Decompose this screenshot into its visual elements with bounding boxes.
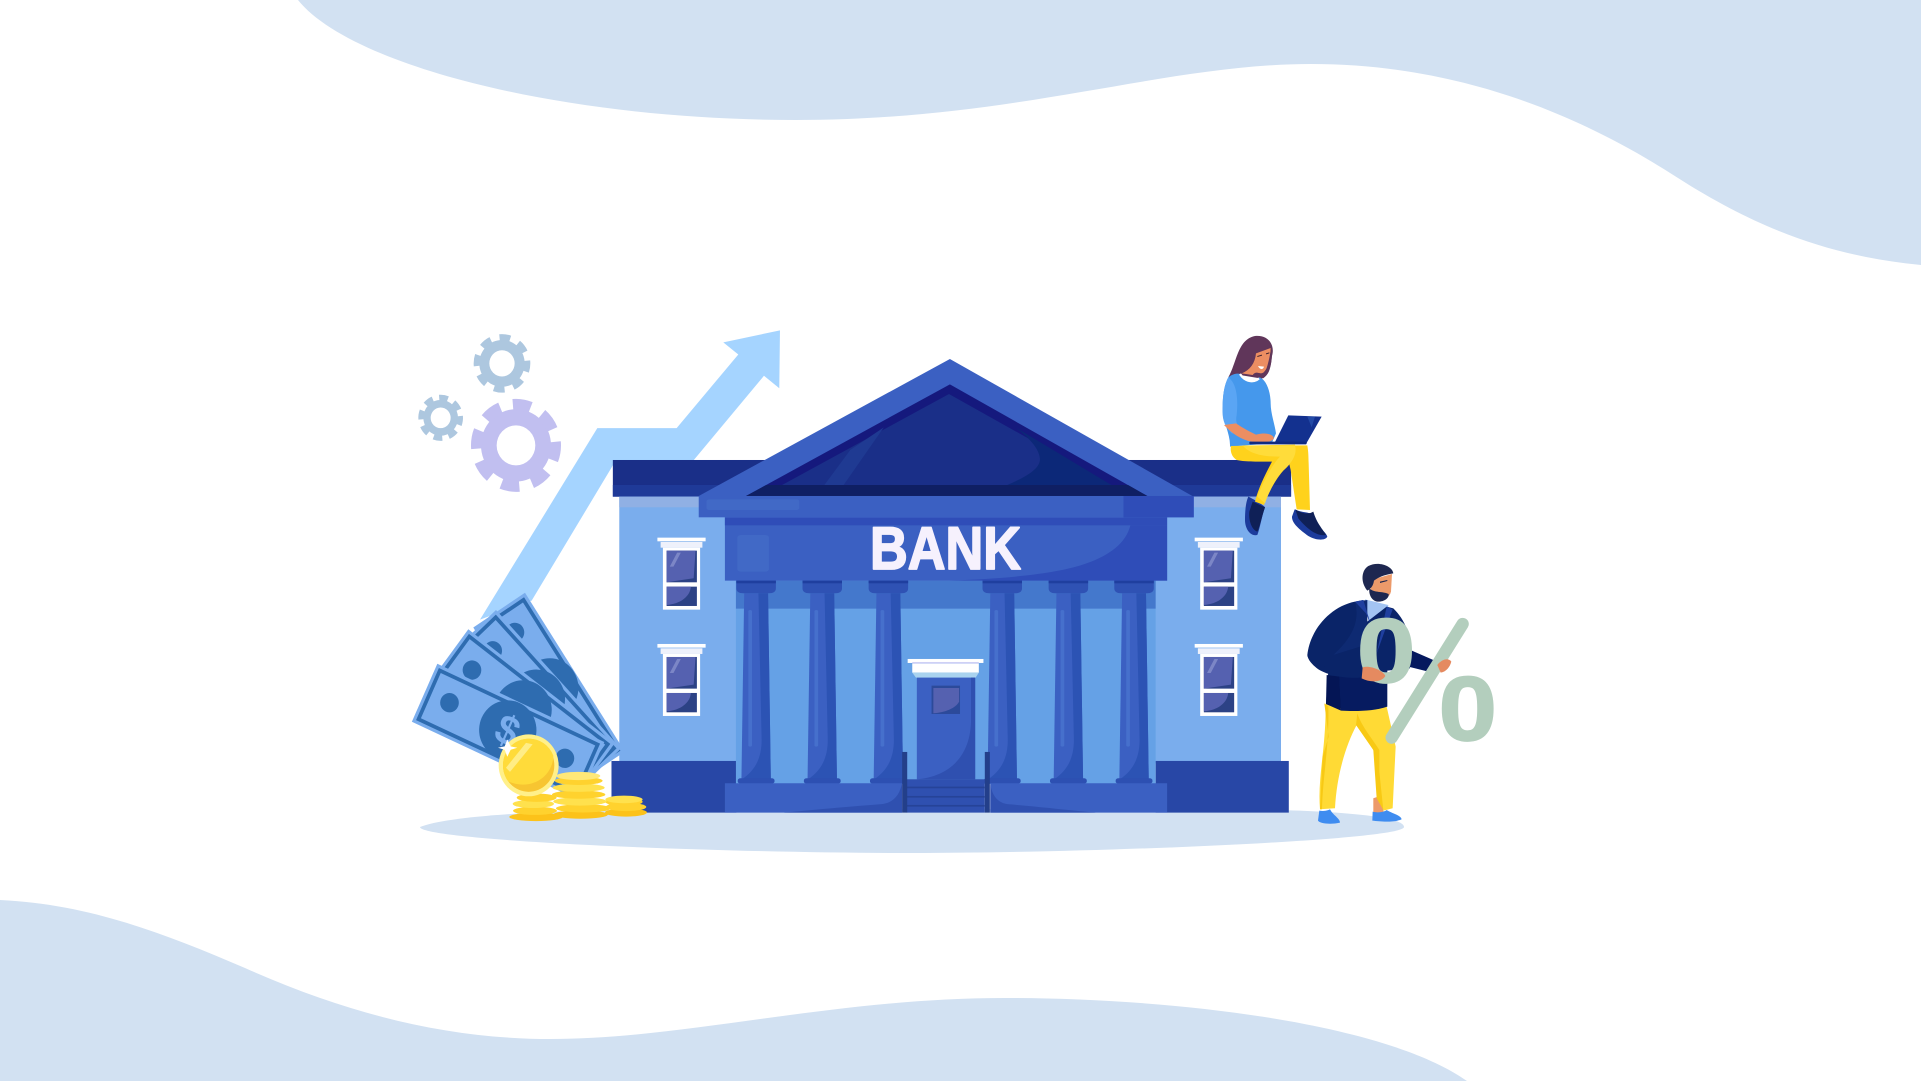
hand <box>1250 433 1273 441</box>
hair <box>1228 336 1273 379</box>
collar <box>1240 374 1259 381</box>
eyes <box>1257 352 1269 357</box>
shoes <box>1318 809 1402 824</box>
side plinths <box>611 761 1289 813</box>
portico recess <box>736 581 1156 784</box>
banknotes <box>412 593 625 800</box>
smile <box>1258 366 1264 369</box>
near arm sleeve <box>1307 655 1363 678</box>
banknote second <box>431 629 615 794</box>
coin stack middle <box>552 772 611 819</box>
growth arrow <box>480 330 780 620</box>
far shoe <box>1245 497 1265 535</box>
arm <box>1224 423 1274 442</box>
coins <box>498 734 647 821</box>
trousers <box>1319 703 1396 811</box>
icon: large purple gear <box>473 401 559 489</box>
icon: top gear <box>475 335 529 392</box>
top background wave <box>298 0 1921 265</box>
near thigh <box>1231 445 1296 505</box>
icon: small gear <box>420 396 462 439</box>
large coin <box>498 734 559 796</box>
bank building <box>611 359 1291 813</box>
percent sign: 0 <box>1357 601 1415 702</box>
banknote third <box>451 610 621 792</box>
bottom background wave <box>0 900 1467 1081</box>
head <box>1363 564 1393 602</box>
banknote rear <box>473 593 625 786</box>
holding hand <box>1362 667 1385 681</box>
face <box>1242 348 1271 375</box>
walls <box>619 497 1281 763</box>
coin stack left <box>509 794 563 821</box>
bank sign: BANK <box>870 515 1021 582</box>
sleeve <box>1222 377 1242 433</box>
woman with laptop <box>1222 336 1327 540</box>
hair strand <box>1263 348 1272 379</box>
banknote front: $ <box>488 704 527 756</box>
percent sign: 0 <box>1439 659 1497 760</box>
icon: gears <box>420 335 559 489</box>
skin ankle <box>1373 796 1384 815</box>
entablature <box>725 517 1167 581</box>
jacket <box>1307 600 1412 711</box>
percent sign <box>1357 601 1497 760</box>
ground shadow <box>420 809 1404 853</box>
sweater <box>1223 374 1276 447</box>
banknote front <box>412 664 604 800</box>
near shoe <box>1292 509 1327 540</box>
coin stack right <box>605 796 647 817</box>
side roof <box>613 460 1291 497</box>
cornice <box>699 496 1194 517</box>
neck <box>1365 599 1388 622</box>
far arm <box>1407 648 1433 672</box>
man holding percent sign <box>1307 564 1497 824</box>
pediment <box>699 359 1192 496</box>
laptop <box>1249 415 1322 444</box>
far hand <box>1437 659 1451 673</box>
base <box>725 783 1167 813</box>
far leg <box>1285 445 1310 510</box>
steps <box>902 752 990 813</box>
door <box>908 659 983 779</box>
columns <box>736 581 1154 784</box>
windows <box>657 538 1243 716</box>
